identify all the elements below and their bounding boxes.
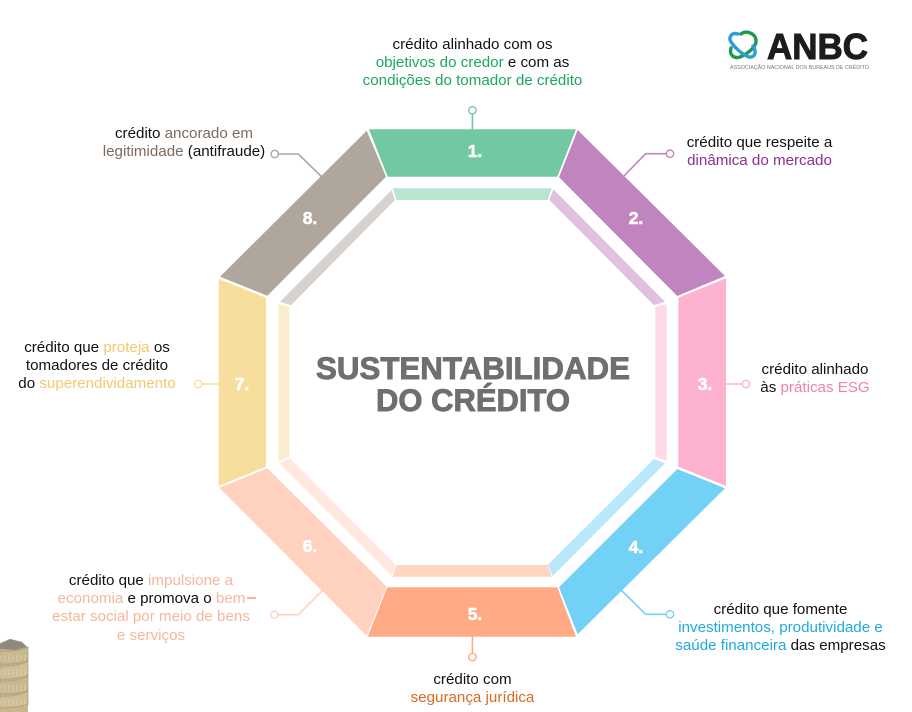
- icon: ANBC knot mark: [730, 32, 756, 58]
- logo tagline: ASSOCIAÇÃO NACIONAL DOS BUREAUS DE CRÉDITO: [730, 64, 869, 71]
- number 5: 5.: [468, 604, 482, 624]
- title: DO CRÉDITO: [376, 382, 570, 418]
- logo: ANBC: [730, 26, 869, 71]
- text 2: dinâmica do mercado: [687, 152, 832, 169]
- octagon outer segments: [219, 129, 726, 637]
- inner segment 2: [549, 189, 665, 305]
- connector 7: [195, 380, 221, 388]
- octagon inner segments: [278, 188, 667, 577]
- connector 3: [724, 380, 750, 388]
- connector 1: [469, 107, 476, 131]
- text 7: tomadores de crédito: [26, 357, 168, 374]
- segment 4: [559, 469, 725, 634]
- text 4: saúde financeira das empresas: [675, 637, 886, 654]
- text 7: do superendividamento: [18, 375, 176, 392]
- text 6: estar social por meio de bens: [52, 608, 250, 625]
- text 1: condições do tomador de crédito: [363, 72, 582, 89]
- title: SUSTENTABILIDADE: [316, 350, 630, 386]
- segment 1: [369, 129, 576, 177]
- text 1: crédito alinhado com os: [393, 36, 553, 53]
- inner segment 4: [548, 459, 665, 576]
- segment 3: [678, 278, 726, 486]
- number 3: 3.: [698, 374, 712, 394]
- connector lines and dots: [195, 107, 750, 661]
- text 3: às práticas ESG: [760, 379, 870, 396]
- segment 7: [219, 279, 266, 486]
- segment 8: [220, 131, 386, 296]
- text 8: crédito ancorado em: [115, 125, 253, 142]
- inner segment 3: [655, 304, 667, 461]
- text 4: investimentos, produtividade e: [678, 619, 883, 636]
- text 6: e serviços: [117, 627, 186, 644]
- text 2: crédito que respeite a: [687, 134, 833, 151]
- segment 5: [368, 587, 576, 637]
- connector 6: [271, 588, 325, 618]
- segment 6: [219, 468, 387, 636]
- segment numbers: [235, 141, 712, 624]
- inner segment 7: [278, 304, 289, 461]
- segment 2: [559, 130, 725, 296]
- logo wordmark: ANBC: [767, 26, 868, 67]
- number 8: 8.: [303, 208, 317, 228]
- number 2: 2.: [629, 208, 643, 228]
- text 5: crédito com: [433, 671, 512, 688]
- number 6: 6.: [303, 536, 317, 556]
- number 7: 7.: [235, 374, 249, 394]
- inner segment 5: [393, 565, 552, 577]
- icon: stack of coins: [0, 639, 28, 712]
- number 4: 4.: [629, 537, 643, 557]
- title: [316, 350, 630, 418]
- connector 5: [469, 635, 476, 661]
- text 6: economia e promova o bem: [58, 590, 245, 607]
- inner segment 6: [279, 458, 396, 576]
- text 8: legitimidade (antifraude): [103, 143, 265, 160]
- text 4: crédito que fomente: [714, 601, 847, 618]
- text 7: crédito que proteja os: [24, 339, 170, 356]
- connector 8: [271, 150, 324, 179]
- connector 4: [619, 588, 674, 618]
- number 1: 1.: [468, 141, 482, 161]
- text 6: crédito que impulsione a: [69, 572, 233, 589]
- text 5: segurança jurídica: [411, 689, 535, 706]
- hyphen after bem: [247, 597, 256, 599]
- text 1: objetivos do credor e com as: [376, 54, 569, 71]
- text 3: crédito alinhado: [762, 361, 868, 378]
- connector 2: [621, 150, 674, 179]
- inner segment 8: [280, 190, 395, 305]
- inner segment 1: [393, 188, 552, 200]
